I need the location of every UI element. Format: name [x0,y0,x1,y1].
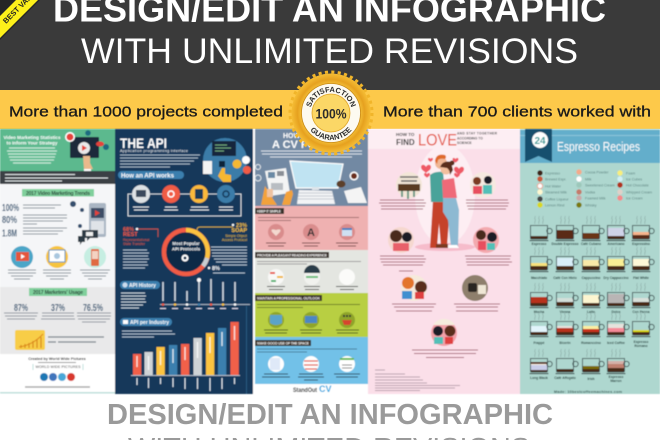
illustration: device and chat [70,201,106,245]
icons: simple row: A [307,227,315,239]
heading: how to find love [396,130,498,150]
coffee cups row 4: Romano [634,344,648,348]
stat paragraphs [23,205,67,234]
heading: how to design a cv [272,133,324,151]
rest paragraph [123,250,149,268]
callout: 23% soap: Simple Object [225,234,247,238]
logo: standout cv: StandOut [293,387,318,394]
section label: professional outlook: MAINTAIN A PROFESSIONAL OUTLOOK [257,296,320,300]
pill: api per industry [120,318,172,326]
logo: standout cv: CV [319,384,332,394]
coffee cups row 2: Macchiato [531,276,547,280]
icon: phone [84,246,106,268]
callout: 68% rest [123,227,158,246]
section text [258,218,359,220]
heading: how to find love: LOVE [418,130,457,150]
coffee cups row 4 [530,312,654,348]
cv intro [261,151,362,157]
coffee cups row 5: Irish [588,377,594,381]
coffee cups row 3: Latte [587,310,595,314]
legend: Steamed Milk [545,190,567,194]
callout: 68% rest: 68% [123,227,134,233]
photo: couple kiss circle [401,275,427,301]
legend: Espresso [545,172,560,176]
section text [257,262,361,264]
credit: world wide pictures: WORLD WIDE PICTURES [36,365,81,369]
coffee cups row 2: Cappuccino [582,276,600,280]
coffee cups row 5: Marron [610,379,622,383]
header background [0,0,660,91]
coffee cups row 4: Romanccino [581,341,601,345]
section label: make use of space [255,340,311,346]
captions: space row [262,374,360,380]
coffee cups row 4: Espresso [634,340,648,344]
logo: standout cv [293,384,332,394]
flow step: data access [190,185,208,203]
coffee cups row 5 [530,349,629,383]
panel: espresso recipes [520,129,660,394]
section label: keep it simple: KEEP IT SIMPLE [257,210,282,214]
coffee cups row 1: Double Espresso [552,242,578,246]
flow step: client [132,185,150,203]
title line 2: WITH UNLIMITED REVISIONS [81,32,578,71]
section label: make use of space: MAKE GOOD USE OF THE SPACE [257,342,310,346]
bar chart: api per industry [131,322,240,391]
section label: pleasant reading: PROVIDE A PLEASANT READING EXPERIENCE [257,254,328,258]
social icons [40,373,75,381]
heading: video marketing statistics: Video Marketing Statistics [3,135,61,140]
heading: how to find love: ACCORDING TO [457,136,483,140]
coffee cups row 2: Dry Cappuccino [603,276,629,280]
coffee cups row 2: Café Con Hielo [553,276,577,280]
credit: world wide pictures: Created by World Wide Pictures [28,357,86,361]
photo: coffee circle [462,275,488,301]
stat 37%: 37% [51,303,65,314]
badge text: 100%: 100% [316,106,347,122]
coffee cups row 5: Long Black [530,376,548,380]
donut chart: protocols: API Protocols [172,246,201,252]
pill: api history [120,281,160,289]
legend: Milk [585,178,592,182]
flow step: request [162,185,180,203]
photo: couple circle mid right [473,227,499,253]
captions: reading row [267,286,358,290]
coffee cups row 4: Iced Coffee [607,341,625,345]
bookmark with number 24: 24 [534,136,546,147]
stat 80%: 80% [2,215,17,226]
icon: red video card [11,246,33,268]
ribbon: best value [0,0,41,40]
coffee cups row 2: Flat White [633,276,649,280]
badge text: satisfaction: SATISFACTION [306,86,356,107]
icons: outlook row [268,312,355,328]
subheading: Application programming interface [120,149,188,153]
section label: professional outlook [255,295,322,301]
heading: how to find love: HOW TO [396,132,415,137]
references [375,370,460,390]
stat: clients worked with: More than 700 clients worked with [383,104,651,120]
heading: how to find love: SCIENCE [457,141,472,145]
intro paragraph [7,148,57,163]
pill: api history: API History [129,283,156,289]
heading: marketers usage [29,288,87,296]
dark band text [5,174,108,181]
coffee cups row 3: Mocha [534,310,544,314]
coffee cups row 3: Dolce [612,310,621,314]
coffee cups row 2 [530,247,654,280]
heading: how to find love: AND STAY TOGETHER [457,132,498,136]
api intro [120,155,200,167]
coffee cups row 1: Americano [607,242,625,246]
coffee cups row 3: Con Panna [632,310,650,314]
coffee cups row 1: Espressino [632,242,650,246]
stat 100%: 100% [2,203,19,214]
panel: find love [368,129,520,394]
heading: how to find love: FIND [396,138,415,147]
coffee cups row 1: Espresso [532,242,546,246]
coffee cups row 1 [530,216,654,246]
callout: 8% [208,266,245,273]
photo: couple circle mid left [388,227,414,253]
hearts [421,158,464,178]
coffee cups row 3 [530,283,654,314]
callout: 23% soap: 23% [236,223,247,229]
love text blocks [379,200,512,358]
callout: 68% rest: State Transfer [123,242,146,246]
legend: Hot Chocolate [626,184,649,188]
coffee cups row 1: Café Cubano [581,242,601,246]
donut chart: protocols [164,230,208,274]
legend: Sweetened Cream [585,184,615,188]
section text [257,349,357,352]
photo: kitchen circle [396,172,422,199]
illustration: screen with play and hand [65,130,109,171]
legend: Hot Water [545,184,562,188]
coffee cups row 4: Frappé [534,341,545,345]
stat 76.5%: 76.5% [83,303,103,314]
callout: 23% soap: SOAP [231,228,247,234]
coffee cups row 5: Café Affogato [554,376,576,380]
legend: Coffee Liqueur [545,198,569,202]
legend: Foam [626,172,635,176]
heading: espresso recipes: Espresso Recipes [557,139,640,154]
donut chart: protocols: Most Popular [172,241,200,246]
callout: 23% soap [197,223,247,242]
infographic collage [0,129,660,394]
industry paragraph [122,331,175,337]
coffee cups row 5: Espresso [609,375,623,379]
icons: simple row [268,224,355,240]
heading: how to design a cv: HOW [283,133,300,140]
legend: Whisky [585,204,597,208]
heading: 2017 trends [22,189,94,197]
icons: space row [268,356,355,372]
flow diagram [128,185,241,216]
icon captions [8,270,110,279]
yellow stats band [0,90,660,129]
callout: 23% soap: Access Protocol [222,238,247,242]
usage paragraphs [4,313,111,322]
captions: simple row [266,243,358,246]
satisfaction guarantee badge [288,70,374,156]
section label: pleasant reading [255,252,329,258]
section label: keep it simple [255,208,284,214]
bottom caption line 1: DESIGN/EDIT AN INFOGRAPHIC [107,399,553,431]
divider line [246,306,248,394]
footer note [25,386,90,388]
badge text: guarantee: GUARANTEE [311,126,352,140]
illustration: couple [415,145,475,251]
callout: 68% rest: Representational [123,238,150,242]
panel: video marketing [0,129,115,394]
legend: Brewed Espr. [545,178,566,182]
heading: marketers usage: 2017 Marketers' Usage [33,290,83,296]
photo: couple circle top right [470,172,496,198]
captions: outlook row [264,330,359,333]
legend: Vodka [585,190,595,194]
panel: video marketing: to Inform Your Strategy [7,140,58,146]
illustration: desk with monitor [255,161,367,205]
legend [537,169,652,208]
icons: reading row [268,265,355,285]
flow step: response [217,185,235,203]
growth note [48,337,104,342]
soap paragraph [211,247,247,265]
callout: 8%: 8% [212,266,220,272]
stat 87%: 87% [14,303,28,314]
heading: 2017 trends: 2017 Video Marketing Trends [26,191,90,197]
history paragraph [121,293,146,308]
panel: cv design [253,129,368,394]
credit: world wide pictures [28,357,86,370]
legend: Whipped Cream [626,190,652,194]
panel: the api [115,129,253,394]
stat 1.8M: 1.8M [2,228,17,240]
legend: Lemon Rind [545,204,564,208]
illustration: api circle and hand [203,138,251,182]
icon: yellow screen [46,246,68,268]
heading: the api: THE API [120,135,167,151]
pill: how an api works: How an API works [121,172,174,180]
legend: Ice Cream [626,196,643,200]
timeline [160,278,250,308]
legend: Cocoa Powder [585,170,609,174]
legend: Foamed Milk [585,196,606,200]
section text [257,304,360,308]
stat: projects completed: More than 1000 projects completed [9,104,283,120]
chart icon: yellow growth [15,330,45,350]
bookmark with number 24 [525,129,552,162]
source credit: Made: 10bestcoffeemachines.com [554,390,623,394]
pill: api per industry: API per Industry [130,320,169,326]
coffee cups row 4: Bicerin [559,341,571,345]
callout: 68% rest: REST [123,232,138,238]
coffee cups row 3: Vienna [560,310,571,314]
legend: Ice Cubes [626,178,642,182]
photo: couple bottom circle [431,319,457,346]
heading: how to design a cv: A CV FOR [272,139,324,151]
